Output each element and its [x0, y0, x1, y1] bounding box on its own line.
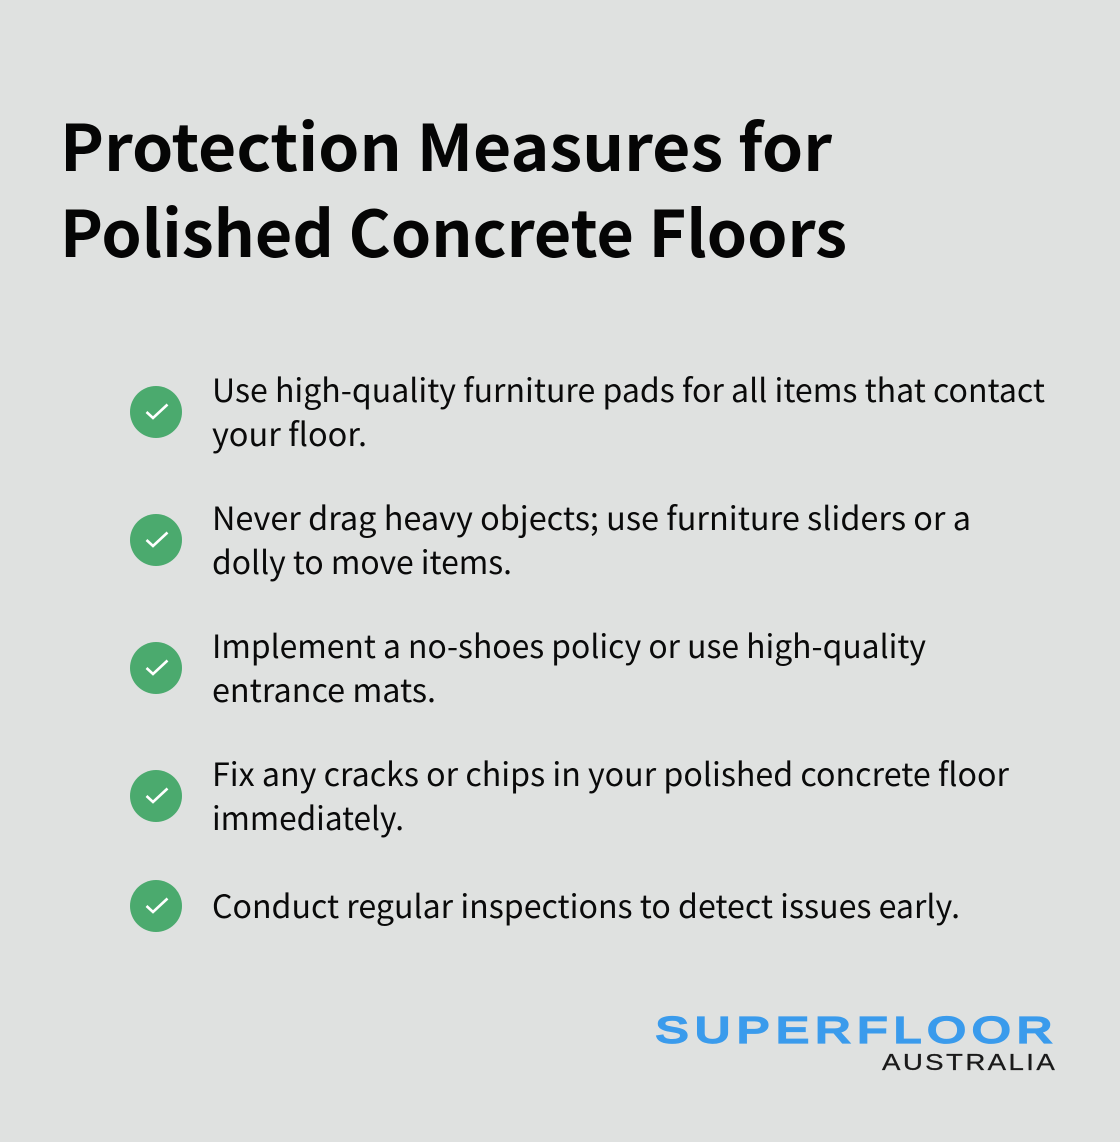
logo: Superfloor Australia — [656, 1011, 1055, 1075]
logo: Superfloor Australia: AUSTRALIA — [882, 1050, 1055, 1075]
item 3: no-shoes policy — [130, 622, 926, 712]
logo: Superfloor Australia: SUPERFLOOR — [656, 1011, 1052, 1051]
item 5: inspections: Conduct regular inspections to detect issues early. — [212, 882, 960, 928]
item 4: fix cracks: Fix any cracks or chips in your polished concrete floor — [212, 750, 1010, 796]
title: Polished Concrete Floors — [60, 184, 847, 276]
title: Protection Measures for — [60, 98, 832, 190]
item 3: no-shoes policy: Implement a no-shoes policy or use high-quality — [212, 622, 926, 668]
title — [60, 98, 847, 276]
checklist — [130, 366, 1045, 932]
item 2: never drag: dolly to move items. — [212, 538, 512, 584]
item 2: never drag: Never drag heavy objects; use furniture sliders or a — [212, 494, 971, 540]
item 1: furniture pads: your floor. — [212, 410, 367, 456]
item 4: fix cracks — [130, 750, 1010, 840]
item 3: no-shoes policy: entrance mats. — [212, 666, 436, 712]
item 4: fix cracks: immediately. — [212, 794, 404, 840]
item 1: furniture pads — [130, 366, 1045, 456]
item 1: furniture pads: Use high-quality furniture pads for all items that contact — [212, 366, 1045, 412]
item 2: never drag — [130, 494, 971, 584]
